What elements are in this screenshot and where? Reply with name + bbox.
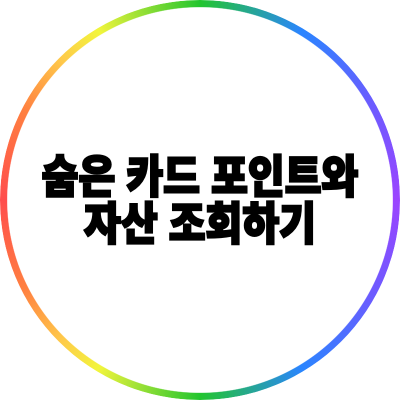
title line 2: 자산 조회하기 [84, 200, 316, 250]
title [42, 153, 358, 250]
title line 1: 숨은 카드 포인트와 [42, 153, 358, 203]
